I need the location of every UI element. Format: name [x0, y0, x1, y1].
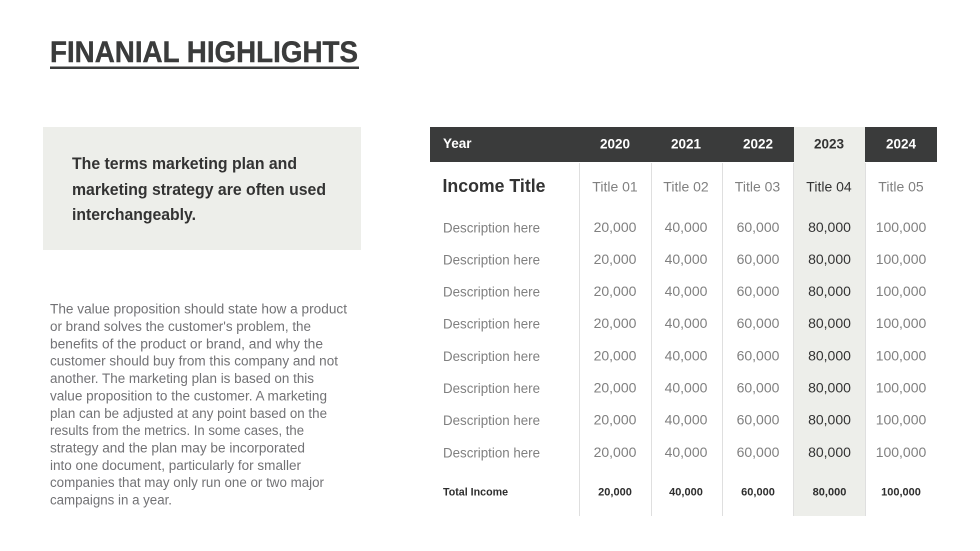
row 5: 80,000 [808, 348, 851, 364]
row 5: 60,000 [737, 348, 780, 364]
row 2 [443, 251, 927, 268]
table header: Year [443, 136, 472, 151]
row 7: Description here [443, 413, 540, 428]
body text: or brand solves the customer's problem, the [50, 319, 311, 334]
income title row: Title 05 [878, 178, 924, 194]
total income row: 100,000 [881, 486, 921, 498]
income title row [442, 176, 924, 196]
row 8: Description here [443, 446, 540, 460]
table header: 2024 [886, 136, 917, 152]
income title row: Title 02 [663, 178, 709, 194]
row 3 [443, 283, 927, 300]
table header: 2021 [671, 136, 702, 152]
table header: 2020 [600, 136, 630, 152]
row 4: Description here [443, 316, 540, 332]
total income row: 60,000 [741, 486, 775, 498]
row 7: 40,000 [665, 412, 708, 428]
row 4: 40,000 [665, 315, 708, 331]
total income row: Total Income [443, 486, 508, 498]
row 3: 20,000 [594, 283, 637, 299]
row 1: 80,000 [808, 219, 851, 235]
body text: customer should buy from this company and not [50, 354, 338, 368]
row 4: 80,000 [808, 315, 851, 331]
row 4: 60,000 [737, 315, 780, 331]
row 6 [443, 380, 927, 396]
income title row: Title 04 [806, 178, 852, 194]
row 1: Description here [443, 220, 540, 236]
income title row: Title 03 [735, 178, 780, 194]
row 2: 60,000 [737, 251, 780, 267]
row 7: 20,000 [594, 412, 637, 428]
row 1 [443, 219, 927, 236]
row 2: 20,000 [594, 251, 637, 267]
row 1: 100,000 [876, 219, 927, 235]
row 6: 20,000 [594, 380, 637, 396]
row 5 [443, 348, 927, 364]
body text: companies that may only run one or two major [50, 475, 324, 490]
row 5: Description here [443, 349, 540, 364]
row 6: Description here [443, 381, 540, 396]
table header [430, 127, 937, 162]
row 8: 100,000 [876, 444, 927, 460]
panel: callout: marketing strategy are often used [72, 180, 326, 199]
body text [50, 302, 347, 508]
body text: another. The marketing plan is based on this [50, 371, 314, 386]
total income row [443, 486, 921, 498]
row 6: 80,000 [808, 380, 851, 396]
income title row: Income Title [442, 176, 546, 196]
row 7: 100,000 [876, 412, 927, 428]
row 6: 100,000 [876, 380, 927, 396]
body text: campaigns in a year. [50, 492, 172, 508]
row 2: 40,000 [665, 251, 708, 267]
row 3: 100,000 [876, 283, 927, 299]
body text: results from the metrics. In some cases, the [50, 423, 304, 438]
row 8: 20,000 [594, 444, 637, 460]
panel: callout [43, 127, 361, 250]
row 7 [443, 412, 927, 428]
income title row: Title 01 [592, 178, 638, 194]
row 3: Description here [443, 284, 540, 300]
row 8 [443, 444, 927, 460]
row 1: 20,000 [594, 219, 637, 235]
row 5: 20,000 [594, 348, 637, 364]
body text: into one document, particularly for smaller [50, 458, 301, 473]
row 5: 40,000 [665, 348, 708, 364]
total income row: 40,000 [669, 486, 703, 498]
body text: benefits of the product or brand, and why the [50, 336, 323, 352]
row 7: 60,000 [737, 412, 780, 428]
body text: The value proposition should state how a product [50, 302, 347, 316]
row 3: 80,000 [808, 283, 851, 299]
row 2: Description here [443, 252, 540, 268]
panel: callout: The terms marketing plan and [72, 154, 297, 173]
row 7: 80,000 [808, 412, 851, 428]
row 8: 80,000 [808, 444, 851, 460]
total income row: 80,000 [813, 486, 846, 498]
row 6: 60,000 [737, 380, 780, 396]
row 3: 60,000 [737, 283, 780, 299]
row 5: 100,000 [876, 348, 927, 364]
body text: plan can be adjusted at any point based on the [50, 406, 327, 421]
highlighted 2023 column [794, 162, 865, 516]
body text: strategy and the plan may be incorporated [50, 440, 305, 456]
title: FINANIAL HIGHLIGHTS [50, 36, 358, 69]
row 1: 40,000 [665, 219, 708, 235]
row 8: 60,000 [737, 444, 780, 460]
row 4 [443, 315, 927, 332]
row 3: 40,000 [665, 283, 708, 299]
column dividers [579, 163, 866, 516]
row 6: 40,000 [665, 380, 708, 396]
panel: callout: interchangeably. [72, 205, 196, 224]
row 4: 20,000 [594, 315, 637, 331]
financial table [430, 127, 937, 516]
row 4: 100,000 [876, 315, 927, 331]
row 2: 80,000 [808, 251, 851, 267]
row 8: 40,000 [665, 444, 708, 460]
row 2: 100,000 [876, 251, 927, 267]
row 1: 60,000 [737, 219, 780, 235]
total income row: 20,000 [598, 486, 632, 498]
table header: 2022 [743, 136, 773, 152]
table header: 2023 [814, 136, 845, 152]
body text: value proposition to the customer. A marketing [50, 388, 327, 404]
